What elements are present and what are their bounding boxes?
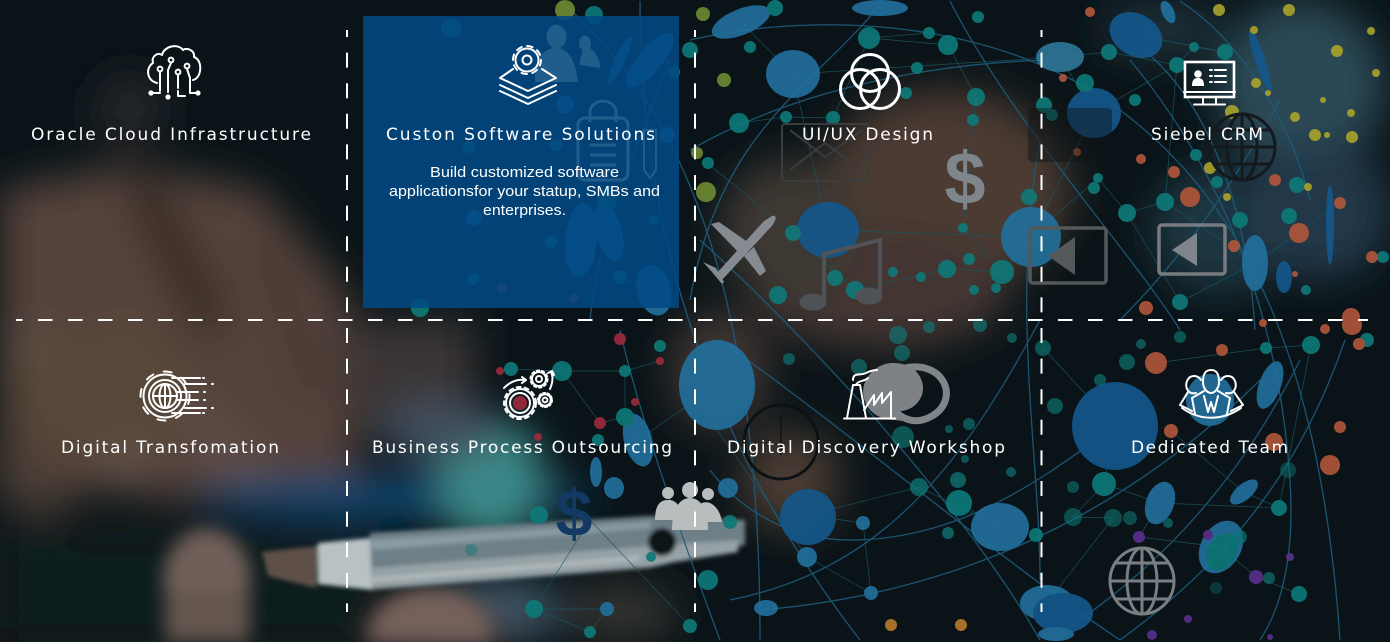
icon: gear on layers bbox=[500, 46, 556, 104]
heading: Digital Transfomation bbox=[61, 438, 279, 458]
icon: circuit cloud bbox=[148, 46, 201, 100]
cell: digital transformation bbox=[61, 372, 279, 458]
ghost icon: dark box bbox=[1028, 108, 1112, 162]
cell: digital discovery workshop bbox=[727, 370, 1005, 458]
heading: Siebel CRM bbox=[1151, 125, 1263, 145]
globe network: connection arcs bbox=[560, 1, 1345, 640]
cell: oracle cloud infrastructure bbox=[31, 46, 311, 145]
heading: Dedicated Team bbox=[1131, 438, 1288, 458]
heading: Digital Discovery Workshop bbox=[727, 438, 1005, 458]
ghost icon: clock bbox=[744, 405, 818, 479]
text block: description: Build customized software bbox=[430, 164, 619, 181]
ghost icons in panel bbox=[535, 25, 656, 180]
text block: description bbox=[389, 164, 660, 219]
icon: team of three bbox=[1180, 370, 1243, 418]
heading: Business Process Outsourcing bbox=[372, 438, 672, 458]
cell: business process outsourcing bbox=[372, 370, 672, 458]
ghost icon: airplane bbox=[703, 216, 776, 284]
panel: custom software solutions bbox=[363, 16, 679, 308]
text block: description: enterprises. bbox=[483, 202, 566, 219]
icon: monitor with profile bbox=[1184, 62, 1235, 104]
cell: siebel crm bbox=[1151, 62, 1263, 145]
cell: dedicated team bbox=[1131, 370, 1288, 458]
text block: description: applicationsfor your statup, SMBs and bbox=[389, 183, 660, 200]
heading: custon software solutions: Custon Software Solutions bbox=[386, 125, 655, 145]
icon: overlapping circles bbox=[840, 54, 900, 108]
ghost icon: speech bubbles bbox=[863, 363, 946, 423]
ghost icon: dollar sign dark: $ bbox=[556, 476, 592, 550]
heading: UI/UX Design bbox=[802, 125, 933, 145]
icon: factory bbox=[844, 370, 895, 418]
icon: gear globe bbox=[140, 372, 213, 420]
icon: gears bbox=[504, 370, 554, 419]
ghost icon: back button right bbox=[1159, 225, 1225, 274]
globe network: nodes bbox=[411, 0, 1389, 641]
cell: ui/ux design bbox=[802, 54, 933, 145]
heading: Oracle Cloud Infrastructure bbox=[31, 125, 311, 145]
ghost icon: dollar sign: $ bbox=[944, 137, 986, 220]
ghost icon: envelope bbox=[782, 124, 869, 181]
globe network: thin links bbox=[420, 22, 1340, 632]
ghost icon: people on podium bbox=[655, 482, 722, 530]
ghost icon: back button left bbox=[1030, 228, 1106, 283]
ghost icon: dark globe bbox=[1209, 114, 1275, 180]
ghost icon: grey globe bbox=[1110, 548, 1174, 614]
ghost icon: music note bbox=[801, 240, 881, 309]
